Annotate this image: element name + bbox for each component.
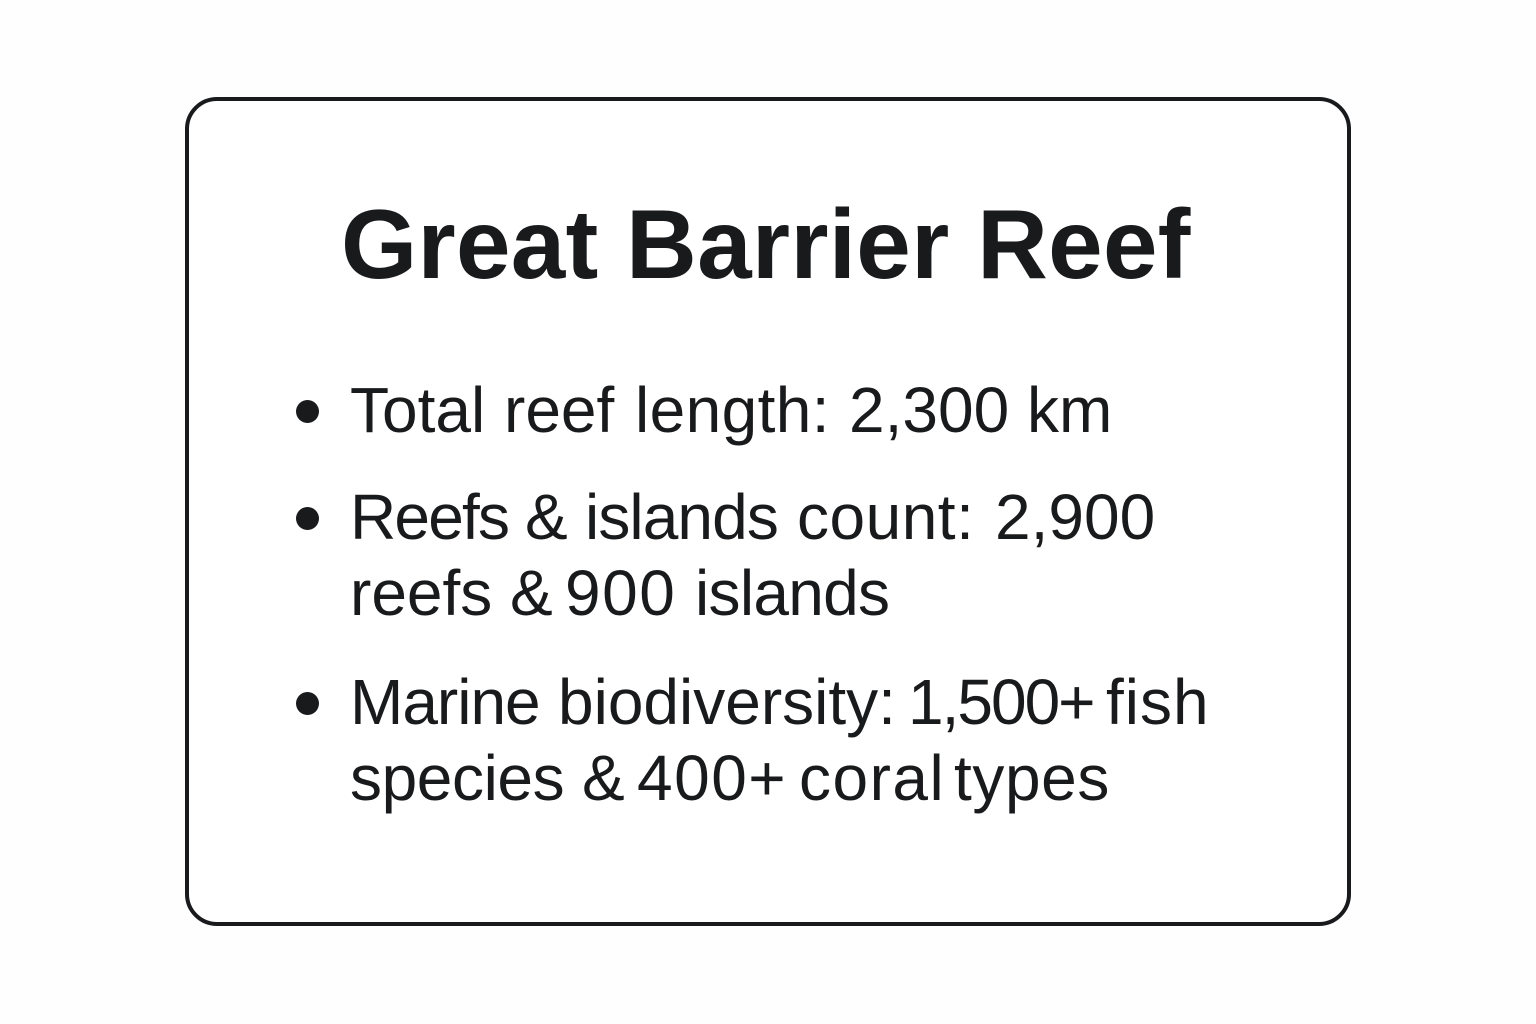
bullet 1: Total	[350, 374, 485, 446]
bullet 2: 2,900	[995, 481, 1155, 553]
bullet 1: 2,300	[849, 374, 1009, 446]
bullet 1: km	[1027, 374, 1112, 446]
bullet 3: &	[582, 742, 625, 814]
bullet 3: coral	[799, 742, 945, 814]
bullet 2: islands	[585, 481, 778, 553]
bullet 1: reef	[504, 374, 614, 446]
bullet 1	[296, 374, 1112, 446]
bullet 2: &	[510, 557, 553, 629]
panel: card	[185, 97, 1351, 926]
bullet 3: biodiversity:	[558, 666, 896, 738]
bullet 3: 1,500+	[908, 666, 1094, 738]
bullet 3: 400+	[637, 742, 787, 814]
bullet 2: &	[525, 481, 568, 553]
bullet 2: 900	[565, 557, 676, 629]
bullet 2	[296, 481, 1155, 629]
bullet 2: Reefs	[350, 481, 508, 553]
bullet 1: length:	[635, 374, 830, 446]
bullet 2: reefs	[350, 557, 492, 629]
bullet 2: islands	[695, 557, 889, 629]
title: Great Barrier Reef	[341, 189, 1191, 299]
bullet 2: count:	[797, 481, 974, 553]
bullet list	[296, 374, 1210, 814]
bullet 3: fish	[1106, 666, 1210, 738]
bullet 3: Marine	[350, 666, 540, 738]
bullet 3: species	[350, 742, 564, 814]
bullet 3	[296, 666, 1210, 814]
bullet 3: types	[954, 742, 1110, 814]
